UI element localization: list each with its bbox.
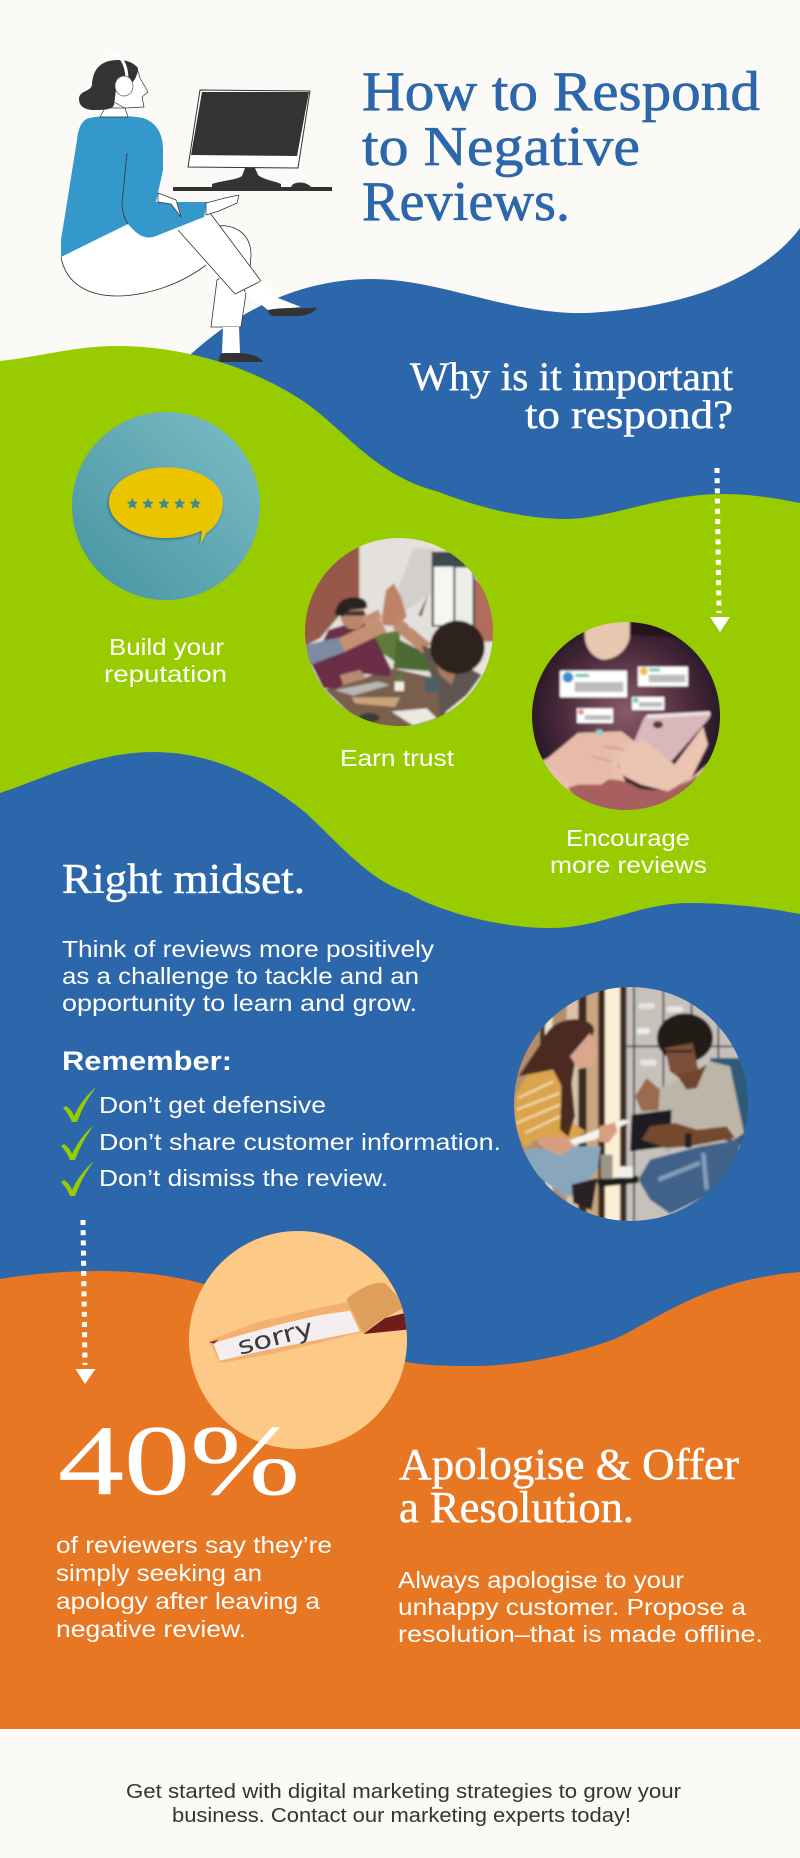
footer call to action [126,1781,681,1827]
label: build your reputation: Build your [109,634,224,660]
shoe: back foot [219,353,263,362]
heading: remember: Remember: [62,1046,232,1076]
desk [173,187,332,191]
title [362,61,760,233]
illustration: woman at computer [61,56,332,362]
checklist text: Don’t dismiss the review. [99,1165,388,1191]
footer call to action: business. Contact our marketing experts today! [172,1805,631,1827]
monitor stand [212,168,281,187]
text block: reviewers seeking apology: apology after leaving a [56,1588,321,1614]
icon: check three [61,1161,94,1196]
text block: always apologise [398,1567,763,1647]
hair [79,60,138,110]
monitor frame [188,90,310,168]
pants: lower leg [211,270,246,327]
heading: right midset: Right midset. [62,857,305,903]
photo: sorry torn paper [185,1228,410,1453]
icon: review bubble with stars [72,412,260,600]
text block: think of reviews [62,936,434,1016]
text block: reviewers seeking apology [56,1532,332,1642]
label: encourage more reviews: more reviews [550,852,707,878]
photo: team high five [300,535,495,730]
headphones ear cup [115,76,133,96]
label: encourage more reviews: Encourage [566,825,690,851]
knee [219,226,251,268]
label: build your reputation [104,634,227,687]
photo: reviews on smartphone [528,618,723,813]
face [110,62,148,108]
hand on knee [158,193,181,217]
checklist text [99,1092,501,1191]
label: build your reputation: reputation [104,661,227,687]
text block: reviewers seeking apology: simply seeking an [56,1560,262,1586]
sweater [61,116,207,257]
monitor screen [191,92,309,156]
footer call to action: Get started with digital marketing strategies to grow your [126,1781,681,1803]
open hand [206,195,239,215]
heading: apologise and offer: a Resolution. [399,1483,634,1532]
ankle [222,327,240,353]
wave: orange band [0,1271,800,1729]
photo: two people talking [510,983,752,1225]
label: earn trust: Earn trust [340,745,455,771]
text block: always apologise: Always apologise to your [398,1567,684,1593]
arrow: dotted down to encourage photo [710,468,730,632]
checklist text: Don’t share customer information. [99,1129,501,1155]
pants outline [61,213,261,296]
photo: sorry torn paper: sorry [234,1314,316,1361]
wave: green band [0,346,800,1000]
checklist [61,1087,501,1196]
sweater fold line [122,153,128,224]
shoe tip overlapping green [219,353,263,362]
wave: blue middle band [0,752,800,1400]
heading: apologise and offer: Apologise & Offer [399,1440,739,1489]
shoe: front foot [268,307,317,316]
statistic: 40 percent: 40% [58,1405,300,1516]
mouse [291,182,311,187]
title: to Negative [362,116,640,178]
text block: always apologise: resolution–that is made offline. [398,1621,763,1647]
headphones band [104,56,127,80]
neck and collar [100,108,128,117]
heading: apologise and offer [399,1440,739,1532]
text block: think of reviews: opportunity to learn and grow. [62,990,417,1016]
icon: check one [63,1087,96,1122]
text block: always apologise: unhappy customer. Propose a [398,1594,747,1620]
foot: crossed leg [245,281,301,310]
checklist text: Don’t get defensive [99,1092,326,1118]
text block: think of reviews: as a challenge to tackle and an [62,963,419,989]
heading: why respond: to respond? [525,392,733,437]
title: Reviews. [362,171,570,233]
heading: why respond: Why is it important [410,354,733,399]
text block: reviewers seeking apology: negative review. [56,1616,246,1642]
title: How to Respond [362,61,760,123]
heading: why respond [410,354,733,437]
icon: check two [61,1125,94,1160]
label: encourage more reviews [550,825,707,878]
wave: blue top band [0,228,800,1000]
text block: think of reviews: Think of reviews more positively [62,936,434,962]
pants: hip and crossed leg [61,213,261,296]
text block: reviewers seeking apology: of reviewers say they’re [56,1532,332,1558]
arrow: dotted down to statistic [76,1220,96,1384]
